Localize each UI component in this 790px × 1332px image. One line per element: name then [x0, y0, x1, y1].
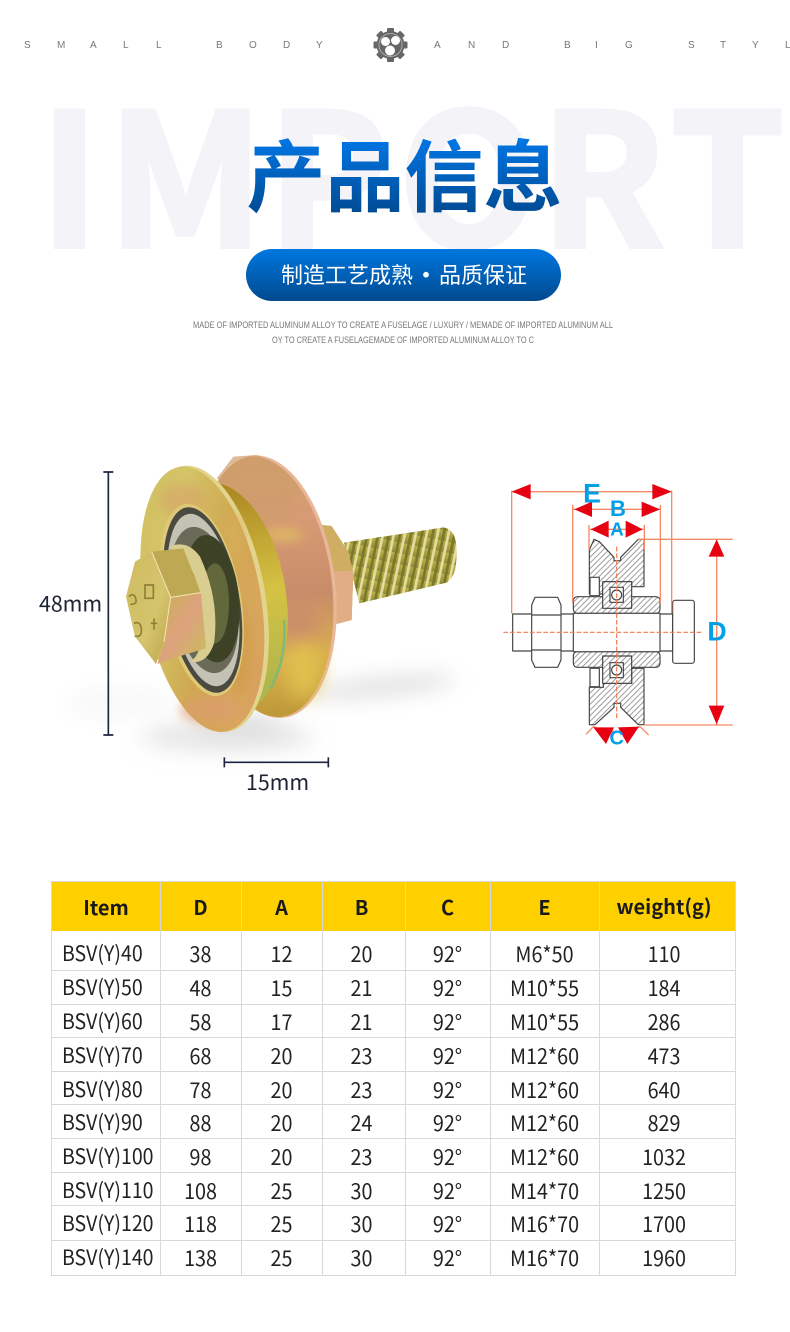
row BSV(Y)80: BSV(Y)80 — [62, 1074, 143, 1104]
subtitle pill — [246, 249, 561, 301]
row BSV(Y)70: 473 — [648, 1041, 680, 1071]
row BSV(Y)40 — [62, 938, 680, 969]
tagline text: SMALLBODYANDBIGSTYL — [24, 40, 790, 51]
row BSV(Y)60 — [62, 1006, 680, 1037]
front flange — [122, 456, 288, 742]
dimension letters: A — [610, 519, 624, 540]
row BSV(Y)100: 92° — [433, 1142, 462, 1172]
dimension letters: C — [609, 727, 624, 749]
row BSV(Y)90 — [62, 1107, 680, 1138]
row BSV(Y)90: 20 — [271, 1108, 292, 1138]
row BSV(Y)110: 92° — [433, 1176, 462, 1206]
bolt head — [126, 548, 206, 664]
icon: gear — [374, 28, 408, 62]
row BSV(Y)120: M16*70 — [510, 1209, 579, 1239]
row BSV(Y)120: 118 — [184, 1209, 217, 1239]
dimension letters: D — [707, 617, 727, 647]
row BSV(Y)80: 92° — [433, 1075, 462, 1105]
row BSV(Y)80: 640 — [648, 1075, 680, 1105]
row BSV(Y)60: 92° — [433, 1007, 462, 1037]
row BSV(Y)90: 88 — [190, 1108, 211, 1138]
dimension letters: E — [583, 479, 601, 509]
table header — [52, 882, 735, 931]
subtitle text: 制造工艺成熟 品质保证 — [281, 258, 527, 290]
row BSV(Y)140: 25 — [271, 1243, 292, 1273]
dimension: width line — [224, 757, 328, 767]
row BSV(Y)110: M14*70 — [510, 1176, 579, 1206]
row BSV(Y)70: 92° — [433, 1041, 462, 1071]
row BSV(Y)40: 12 — [271, 939, 292, 969]
row BSV(Y)50: 48 — [190, 973, 211, 1003]
row BSV(Y)140: 1960 — [642, 1243, 686, 1273]
dimension letters — [583, 479, 727, 749]
row BSV(Y)80: 20 — [271, 1075, 292, 1105]
row BSV(Y)110 — [62, 1175, 686, 1206]
row BSV(Y)70: 23 — [351, 1041, 372, 1071]
dimension lines — [512, 491, 733, 735]
row BSV(Y)100: BSV(Y)100 — [62, 1141, 154, 1171]
specification table — [51, 881, 736, 1276]
row BSV(Y)100: 20 — [271, 1142, 292, 1172]
table header: weight(g) — [616, 891, 712, 920]
row BSV(Y)100: 23 — [351, 1142, 372, 1172]
row BSV(Y)60: BSV(Y)60 — [62, 1006, 143, 1036]
bearing — [146, 497, 257, 703]
row BSV(Y)110: 25 — [271, 1176, 292, 1206]
label: 15mm: 15mm — [246, 766, 309, 797]
product photo with dimensions — [39, 455, 457, 797]
row BSV(Y)60: M10*55 — [510, 1007, 579, 1037]
row BSV(Y)80: 78 — [190, 1075, 211, 1105]
washer — [168, 544, 215, 662]
row BSV(Y)40: 110 — [648, 939, 680, 969]
top tagline with gear icon — [24, 28, 790, 62]
row BSV(Y)70: BSV(Y)70 — [62, 1040, 143, 1070]
subtitle text: · — [415, 258, 437, 290]
row BSV(Y)50: BSV(Y)50 — [62, 972, 143, 1002]
row BSV(Y)50 — [62, 972, 680, 1003]
row BSV(Y)90: 92° — [433, 1108, 462, 1138]
groove — [145, 473, 303, 720]
row BSV(Y)80: 23 — [351, 1075, 372, 1105]
row BSV(Y)140 — [62, 1242, 686, 1273]
row BSV(Y)140: 92° — [433, 1243, 462, 1273]
row BSV(Y)60: 58 — [190, 1007, 211, 1037]
row BSV(Y)40: 20 — [351, 939, 372, 969]
label: 48mm: 48mm — [39, 588, 102, 619]
row BSV(Y)90: M12*60 — [510, 1108, 579, 1138]
row BSV(Y)70: 20 — [271, 1041, 292, 1071]
technical section diagram — [503, 479, 733, 749]
center lines — [503, 547, 703, 718]
table header: A — [275, 892, 288, 921]
row BSV(Y)50: M10*55 — [510, 973, 579, 1003]
table header: E — [538, 892, 551, 921]
small description text: OY TO CREATE A FUSELAGEMADE OF IMPORTED ALUMINUM ALLOY TO C — [272, 335, 534, 345]
row BSV(Y)50: 92° — [433, 973, 462, 1003]
section drawing — [513, 539, 694, 725]
row BSV(Y)50: 15 — [271, 973, 292, 1003]
dimension letters: B — [610, 496, 626, 521]
row BSV(Y)140: M16*70 — [510, 1243, 579, 1273]
row BSV(Y)110: 108 — [184, 1176, 217, 1206]
row BSV(Y)140: BSV(Y)140 — [62, 1242, 154, 1272]
row BSV(Y)60: 21 — [351, 1007, 372, 1037]
arrows — [512, 484, 724, 744]
row BSV(Y)110: BSV(Y)110 — [62, 1175, 154, 1205]
row BSV(Y)70 — [62, 1040, 680, 1071]
row BSV(Y)120: 92° — [433, 1209, 462, 1239]
row BSV(Y)50: 184 — [648, 973, 680, 1003]
row BSV(Y)140: 138 — [184, 1243, 217, 1273]
row BSV(Y)140: 30 — [351, 1243, 372, 1273]
row BSV(Y)110: 30 — [351, 1176, 372, 1206]
table header: B — [355, 892, 368, 921]
table header: C — [441, 892, 454, 921]
row BSV(Y)120: 30 — [351, 1209, 372, 1239]
row BSV(Y)120: 25 — [271, 1209, 292, 1239]
rear flange — [185, 447, 351, 726]
row BSV(Y)40: 92° — [433, 939, 462, 969]
small description text — [193, 320, 613, 345]
row BSV(Y)100: 1032 — [642, 1142, 686, 1172]
row BSV(Y)90: 24 — [351, 1108, 372, 1138]
rear nut — [315, 524, 353, 624]
row BSV(Y)40: M6*50 — [515, 939, 574, 969]
row BSV(Y)110: 1250 — [642, 1176, 686, 1206]
row BSV(Y)90: BSV(Y)90 — [62, 1107, 143, 1137]
row BSV(Y)80 — [62, 1074, 680, 1105]
row BSV(Y)100: M12*60 — [510, 1142, 579, 1172]
row BSV(Y)40: 38 — [190, 939, 211, 969]
dimension: height line — [103, 472, 113, 735]
row BSV(Y)90: 829 — [648, 1108, 680, 1138]
row BSV(Y)100 — [62, 1141, 686, 1172]
row BSV(Y)120: 1700 — [642, 1209, 686, 1239]
threaded bolt end — [344, 527, 457, 603]
row BSV(Y)60: 286 — [648, 1007, 680, 1037]
row BSV(Y)80: M12*60 — [510, 1075, 579, 1105]
row BSV(Y)120 — [62, 1208, 686, 1239]
row BSV(Y)120: BSV(Y)120 — [62, 1208, 154, 1238]
row BSV(Y)70: M12*60 — [510, 1041, 579, 1071]
cast shadow — [63, 669, 457, 753]
table header: D — [193, 892, 208, 921]
row BSV(Y)50: 21 — [351, 973, 372, 1003]
row BSV(Y)70: 68 — [190, 1041, 211, 1071]
row BSV(Y)100: 98 — [190, 1142, 211, 1172]
row BSV(Y)40: BSV(Y)40 — [62, 938, 143, 968]
row BSV(Y)60: 17 — [271, 1007, 292, 1037]
table header: Item — [83, 892, 129, 921]
